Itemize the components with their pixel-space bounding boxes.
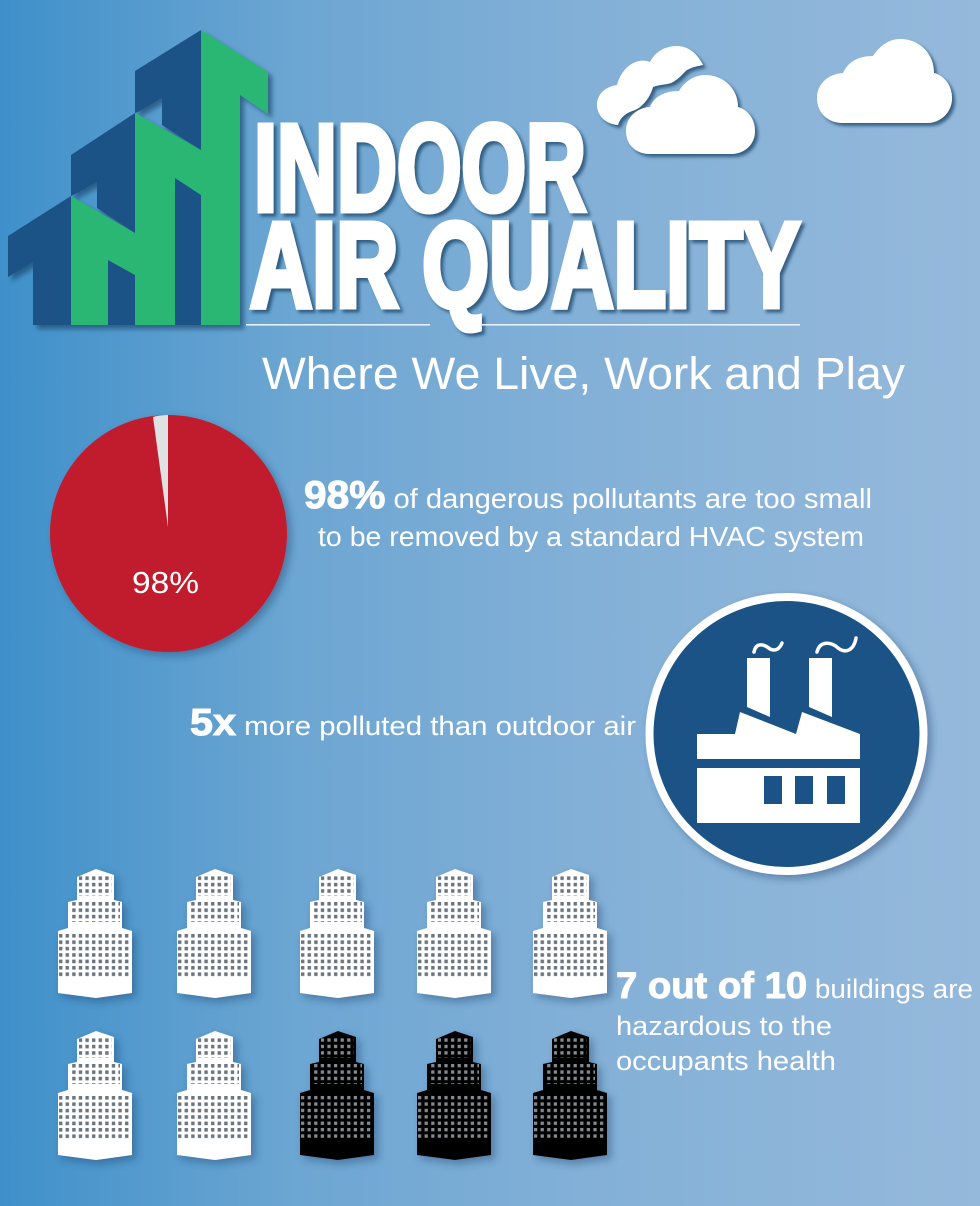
stat text: 98%	[304, 474, 872, 552]
logo: houses	[8, 30, 268, 325]
subtitle: Where We Live, Work and Play	[262, 348, 906, 399]
stat text: 7 out of 10: 7 out of 10 buildings are	[616, 965, 973, 1006]
title underline	[246, 324, 800, 326]
title	[250, 100, 800, 332]
building grid: 7 of 10	[58, 869, 607, 1160]
title: INDOOR	[254, 100, 586, 238]
stat text: 7 out of 10: hazardous to the	[616, 1011, 832, 1041]
icon: factory badge	[650, 597, 924, 871]
cloud: left pair	[597, 46, 755, 154]
stat text: 5x: 5x more polluted than outdoor air	[190, 702, 636, 744]
pie chart: 98%	[50, 415, 287, 652]
stat text: 98%: 98% of dangerous pollutants are too small	[304, 474, 872, 517]
stat text: 98%: to be removed by a standard HVAC system	[318, 521, 864, 552]
stat text: 7 out of 10: occupants health	[616, 1046, 836, 1076]
stat text: 7 out of 10	[616, 965, 973, 1076]
cloud: right	[817, 39, 952, 123]
pie chart: 98%: 98%	[132, 565, 199, 600]
